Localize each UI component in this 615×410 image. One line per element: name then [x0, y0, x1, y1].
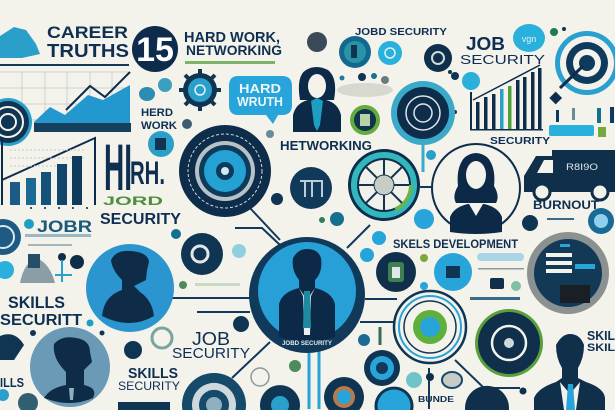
label: hard work: WORK: [141, 120, 177, 132]
skills security left: SKILLS: [8, 293, 65, 312]
top row heading: JOBD SECURITY: [355, 26, 447, 38]
security heading left: SECURITY: [100, 211, 181, 228]
dark dot and leaf: [233, 316, 301, 386]
small circuit icons: [358, 327, 526, 394]
job security heading: [460, 34, 545, 67]
blue badge: vgn: [522, 34, 536, 44]
delivery truck: [524, 150, 615, 200]
central portrait: JOBD SECURITY: [282, 341, 332, 347]
glitched headline HIRH: HI: [104, 130, 132, 204]
green icon: [350, 105, 380, 135]
job security center label: [172, 329, 250, 362]
label: hard work: HERD: [141, 107, 173, 119]
man profile blue circle: [86, 244, 174, 332]
burnout label: BURNOUT: [533, 198, 600, 212]
delivery truck: R8I9O: [566, 162, 598, 172]
bottom ring icons: [374, 386, 509, 410]
gear icon: [179, 69, 221, 111]
skills security label center: [118, 365, 180, 393]
networking wheel: [348, 149, 420, 221]
skills label right: [587, 328, 615, 354]
worker cluster: [0, 253, 84, 283]
right edge badge: [522, 208, 614, 234]
job security heading: SECURITY: [460, 52, 545, 67]
target icon left: [0, 98, 32, 146]
burnout bottom label: BUNDE: [418, 395, 455, 404]
bar chart right: [462, 65, 543, 130]
subtitle: [184, 29, 282, 64]
blue badge: [513, 24, 545, 52]
area line chart: [0, 72, 131, 132]
skills label left bottom: ILLS: [0, 375, 24, 390]
left lower icons: [0, 320, 172, 360]
woman portrait circle: [432, 144, 520, 234]
skills development heading: SKELS DEVELOPMENT: [393, 237, 519, 251]
skills label right: SKIL: [587, 342, 615, 354]
speech bubble: WRUTH: [237, 94, 283, 109]
number badge 15: [132, 26, 178, 72]
number badge 15: 15: [136, 31, 174, 69]
woman avatar top: [293, 67, 341, 132]
bar chart left: [2, 137, 95, 205]
title rule: [0, 64, 129, 66]
dark circle icon: [181, 233, 223, 275]
word hard green: JORD: [103, 194, 164, 208]
title: TRUTHS: [47, 41, 129, 61]
businessman bottom right: [534, 334, 605, 410]
networking heading: HETWORKING: [280, 138, 372, 153]
subtitle: HARD WORK,: [184, 29, 280, 46]
title: CAREER: [47, 23, 128, 42]
skills security left: [0, 293, 82, 329]
security label: SECURITY: [490, 136, 550, 147]
skills icon row: [319, 209, 472, 292]
skills security label center: SKILLS: [128, 365, 178, 382]
round teal icon: [148, 131, 174, 157]
target icon right: [549, 31, 615, 104]
blue paint blob: [0, 27, 40, 58]
large speaker dial: [179, 125, 271, 217]
top row icons: [307, 32, 459, 114]
small teal leaves: [139, 78, 274, 138]
green dots: [550, 27, 566, 36]
title: [47, 23, 129, 61]
gear bottom: [324, 377, 364, 410]
skills security left: SECURITT: [0, 312, 82, 329]
dark building icon: [290, 167, 332, 209]
speech bubble: [229, 76, 292, 124]
left job label: [0, 217, 92, 255]
mini stats row: [549, 107, 614, 137]
speech bubble: HARD: [239, 81, 281, 96]
small dot under networking: [271, 193, 283, 205]
dark lens icon: [475, 309, 543, 377]
small teal dots: [171, 229, 246, 289]
job security center label: JOB: [192, 329, 230, 349]
legend bars: [470, 253, 524, 300]
concentric rings icon: [394, 291, 466, 363]
job security heading: JOB: [466, 34, 505, 54]
skills security label center: SECURITY: [118, 379, 180, 393]
label: hard work: [141, 107, 177, 132]
large magnifier dial: [391, 81, 455, 172]
left job label: JOBR: [37, 217, 92, 236]
central portrait: [249, 237, 365, 353]
bottom icons left: [0, 373, 300, 410]
man profile grey-blue circle: [30, 327, 110, 407]
grey smudge: [337, 83, 393, 97]
subtitle: NETWORKING: [186, 42, 282, 58]
glitched headline HIRH: RH.: [130, 155, 165, 191]
grey dashboard circle: [527, 232, 609, 314]
job security center label: SECURITY: [172, 345, 250, 362]
